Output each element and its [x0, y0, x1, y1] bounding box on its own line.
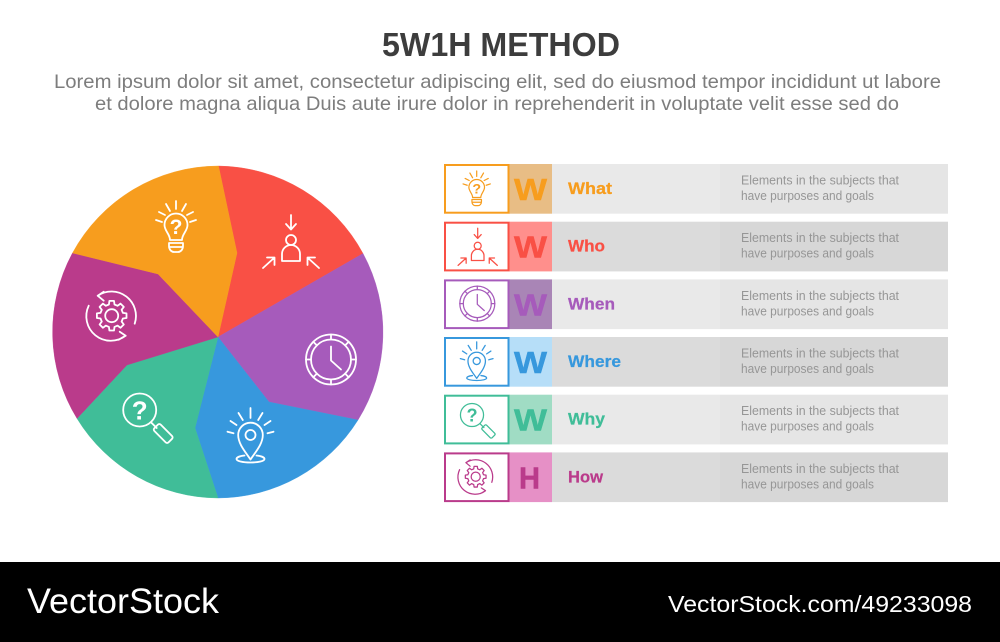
row: where — [445, 337, 948, 387]
icon: magnifier question: ? — [132, 396, 148, 426]
row: what — [445, 164, 948, 214]
icon: light bulb question — [156, 201, 196, 252]
row: what: What — [568, 180, 613, 198]
icon: light bulb question: ? — [170, 216, 182, 239]
row: how: have purposes and goals — [741, 477, 874, 491]
icon: person with arrows — [263, 215, 319, 268]
segment: where — [195, 337, 358, 498]
row: how: Elements in the subjects that — [741, 462, 900, 476]
row: why: Elements in the subjects that — [741, 404, 900, 418]
row: who: have purposes and goals — [741, 247, 874, 261]
row: who: Elements in the subjects that — [741, 231, 900, 245]
row: why: Why — [568, 411, 606, 429]
row: where: Elements in the subjects that — [741, 346, 900, 360]
subtitle text: Lorem ipsum dolor sit amet, consectetur adipiscing elit, sed do eiusmod tempor incididunt ut labore — [54, 71, 941, 93]
icon: clock — [306, 334, 356, 384]
row: why — [445, 395, 948, 444]
row: why: have purposes and goals — [741, 420, 874, 434]
icon: location pin — [228, 408, 274, 462]
row: when: Elements in the subjects that — [741, 289, 900, 303]
row: what: ? — [472, 181, 481, 197]
row: why: ? — [466, 406, 478, 426]
segment: when — [218, 254, 383, 420]
segment: who — [218, 166, 363, 337]
panel: pie chart — [53, 166, 383, 498]
row: how — [445, 452, 948, 502]
segment: how — [53, 253, 218, 418]
row: what: Elements in the subjects that — [741, 174, 900, 188]
icon: gear cycle — [86, 291, 136, 341]
row: where: have purposes and goals — [741, 362, 874, 376]
row: who — [445, 222, 948, 271]
row: where: W — [514, 345, 548, 380]
footer url: VectorStock.com/49233098 — [668, 591, 972, 617]
row: what: W — [514, 172, 548, 207]
footer bar — [0, 562, 1000, 642]
row: when: have purposes and goals — [741, 304, 874, 318]
segment: what — [72, 166, 237, 337]
subtitle text: et dolore magna aliqua Duis aute irure dolor in reprehenderit in voluptate velit esse sed do — [95, 93, 899, 115]
row: why: W — [514, 403, 548, 438]
row: when: W — [514, 287, 548, 322]
footer logo: VectorStock — [27, 582, 220, 621]
title: 5W1H METHOD — [382, 26, 620, 63]
segment: why — [77, 337, 218, 498]
row: how: How — [568, 468, 603, 486]
row: when: When — [568, 295, 615, 313]
row: how: H — [519, 460, 540, 495]
icon: magnifier question — [123, 394, 173, 444]
row: when — [445, 279, 948, 329]
row: who: Who — [568, 238, 605, 256]
row: who: W — [514, 230, 548, 265]
subtitle text — [54, 71, 941, 115]
row: where: Where — [568, 353, 621, 371]
row: what: have purposes and goals — [741, 189, 874, 203]
